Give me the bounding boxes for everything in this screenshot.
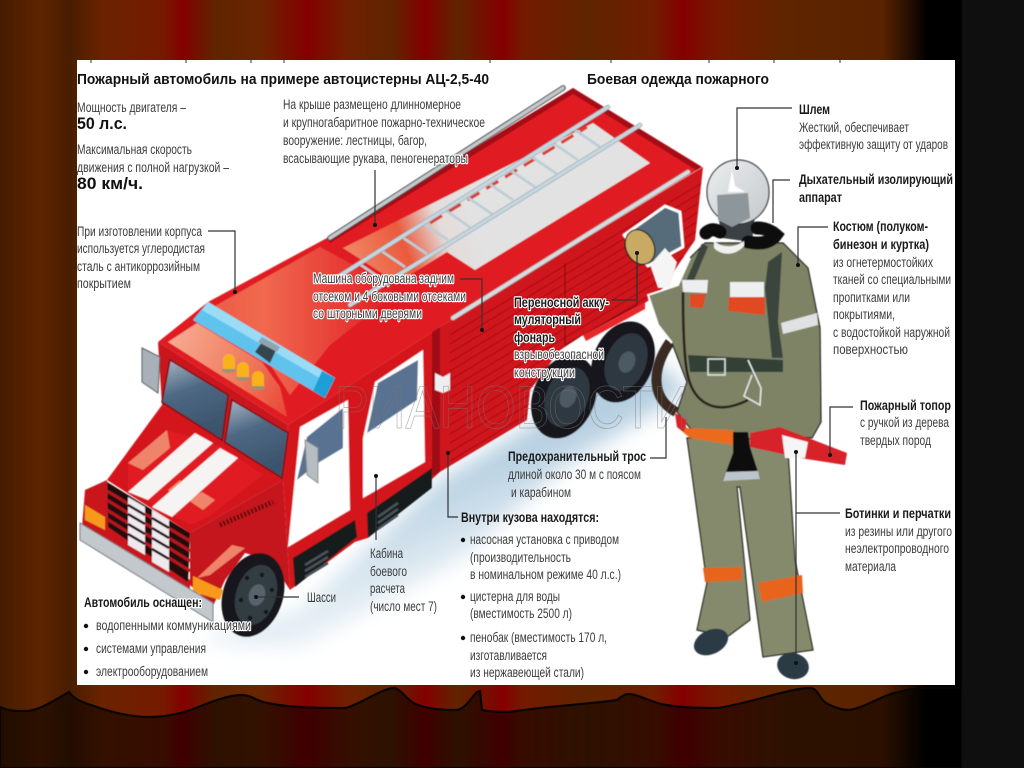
note: suit: с водостойкой наружной	[833, 325, 950, 340]
note: suit: тканей со специальными	[833, 272, 951, 287]
specs: engine and speed: 80 км/ч.	[77, 174, 143, 193]
note: helmet: эффективную защиту от ударов	[799, 137, 948, 152]
mirror left	[142, 348, 160, 393]
light bar	[193, 302, 335, 398]
ground shadow	[200, 350, 690, 650]
cab roof highlight	[215, 247, 400, 395]
back straps	[689, 245, 783, 358]
note: boots and gloves: Ботинки и перчатки	[845, 505, 951, 521]
note: roof equipment: На крыше размещено длинномерное	[283, 97, 461, 112]
rope coil	[656, 342, 676, 412]
note: body steel: При изготовлении корпуса	[77, 224, 202, 239]
note: lantern: Переносной акку-	[514, 294, 609, 310]
list: inside the body: в номинальном режиме 40 л.с.)	[470, 567, 621, 582]
neck	[718, 215, 755, 242]
fur collar	[706, 228, 776, 243]
fender left	[82, 480, 190, 592]
note: lantern: конструкции	[514, 365, 575, 380]
specs: engine and speed: Максимальная скорость	[77, 142, 192, 157]
note: boots and gloves: из резины или другого	[845, 524, 952, 539]
watermark: РИАНОВОСТИ	[335, 374, 690, 441]
note: axe: Пожарный топор	[860, 397, 951, 413]
glove on axe	[782, 435, 808, 458]
door front	[288, 400, 350, 547]
heading: truck: Пожарный автомобиль на примере автоцистерны АЦ-2,5-40	[77, 72, 489, 88]
note: suit: пропитками или	[833, 290, 910, 305]
roof rim shade	[327, 88, 702, 243]
orange safety belt	[675, 413, 733, 445]
axe handle	[750, 427, 847, 465]
firefighter illustration	[620, 160, 847, 683]
note: body steel	[77, 224, 205, 291]
sleeve reflective band	[781, 313, 818, 334]
jacket white outline	[648, 258, 690, 343]
windshield right	[225, 400, 288, 478]
sill vents	[305, 503, 398, 577]
hood raised panel	[128, 430, 263, 525]
glove on lantern	[650, 248, 677, 288]
note: body steel: сталь с антикоррозийным	[77, 259, 200, 274]
fire truck illustration	[80, 88, 710, 650]
carabiner and cord	[683, 292, 761, 407]
note: helmet	[799, 101, 948, 152]
trouser reflective bands	[703, 567, 803, 602]
sills	[293, 468, 432, 587]
list: inside the body: (производительность	[470, 550, 571, 565]
rear wheels	[519, 312, 667, 448]
note: suit	[833, 218, 951, 357]
axe blade	[723, 471, 760, 481]
door rear	[363, 350, 425, 498]
white panel on body	[435, 373, 450, 393]
beacon lights	[222, 354, 265, 390]
cab side	[283, 327, 440, 590]
boots	[690, 624, 812, 683]
list: inside the body	[461, 509, 621, 680]
label: crew cab	[370, 546, 437, 614]
list: inside the body: пенобак (вместимость 170 л,	[470, 630, 607, 645]
specs: engine and speed: 50 л.с.	[77, 114, 127, 133]
waist belt	[688, 355, 783, 372]
note: safety rope: и карабином	[511, 485, 571, 500]
list: inside the body: из нержавеющей стали)	[470, 665, 584, 680]
note: compartments	[313, 271, 466, 321]
box body side	[440, 167, 710, 472]
note: suit: из огнетермостойких	[833, 255, 933, 270]
white neck collar	[714, 241, 744, 254]
chest reflective patches	[682, 280, 765, 315]
note: roof equipment: вооружение: лестницы, багор,	[283, 133, 427, 148]
list: inside the body: изготавливается	[470, 648, 547, 663]
front wheel	[211, 545, 295, 645]
hood side	[190, 480, 290, 606]
heading: clothing: Боевая одежда пожарного	[587, 72, 769, 88]
note: safety rope: Предохранительный трос	[508, 448, 646, 464]
note: suit: покрытиями,	[833, 307, 895, 322]
roof of truck	[158, 88, 702, 425]
roof side rail	[453, 172, 688, 318]
list: vehicle equipment: электрооборудованием	[96, 664, 208, 679]
note: compartments: со шторными дверями	[313, 306, 422, 321]
note: axe: с ручкой из дерева	[860, 415, 949, 430]
note: safety rope: длиной около 30 м с поясом	[508, 467, 641, 482]
label: crew cab: боевого	[370, 564, 407, 579]
note: suit: Костюм (полуком-	[833, 218, 928, 234]
note: helmet: Шлем	[799, 101, 830, 117]
door rear window	[367, 360, 418, 433]
specs: engine and speed	[77, 100, 229, 193]
note: lantern	[514, 294, 609, 380]
note: roof equipment: и крупногабаритное пожарно-техническое	[283, 115, 485, 130]
note: compartments: отсеком и 4 боковыми отсеками	[313, 289, 466, 304]
roof back rail	[330, 88, 563, 238]
windshield left	[162, 360, 228, 440]
infographic panel	[77, 60, 955, 685]
ladder	[333, 107, 640, 305]
side mirror	[305, 440, 318, 483]
label: crew cab: (число мест 7)	[370, 599, 437, 614]
note: compartments: Машина оборудована задним	[313, 271, 454, 286]
note: axe: твердых пород	[860, 433, 931, 448]
note: safety rope	[508, 448, 646, 500]
grille	[107, 482, 190, 582]
label: chassis: Шасси	[307, 590, 336, 605]
roof compartment panel	[343, 123, 650, 283]
note: breathing apparatus: Дыхательный изолирующий	[799, 171, 953, 187]
list: vehicle equipment	[84, 594, 251, 679]
buckle	[708, 359, 725, 375]
axe head	[723, 432, 760, 480]
note: suit: бинезон и куртка)	[833, 236, 929, 252]
hood stripes	[128, 433, 238, 517]
note: body steel: используется углеродистая	[77, 241, 205, 256]
label: crew cab: расчета	[370, 581, 405, 596]
note: boots and gloves: неэлектропроводного	[845, 541, 949, 556]
face visor	[717, 193, 750, 227]
note: breathing apparatus	[799, 171, 953, 205]
cab rear pillar shade	[432, 327, 440, 476]
cab visor	[168, 323, 287, 417]
note: roof equipment	[283, 97, 485, 166]
note: suit: поверхностью	[833, 342, 908, 357]
list: inside the body: (вместимость 2500 л)	[470, 606, 572, 621]
front cab face	[158, 342, 288, 482]
bumper	[80, 523, 213, 622]
leader lines	[208, 108, 853, 665]
note: body steel: покрытием	[77, 276, 131, 291]
list: inside the body: Внутри кузова находятся:	[461, 509, 599, 525]
note: boots and gloves	[845, 505, 952, 574]
note: lantern: фонарь	[514, 329, 555, 345]
headlights	[85, 505, 223, 600]
jacket	[648, 243, 821, 439]
note: roof equipment: всасывающие рукава, пеногенераторы	[283, 151, 468, 166]
trousers	[687, 436, 813, 657]
list: vehicle equipment: водопенными коммуникациями	[96, 618, 251, 633]
list: inside the body: цистерна для воды	[470, 589, 560, 604]
label: crew cab: Кабина	[370, 546, 403, 561]
note: lantern: муляторный	[514, 311, 581, 327]
list: vehicle equipment: системами управления	[96, 641, 206, 656]
side louvers	[220, 502, 273, 525]
list: inside the body: насосная установка с приводом	[470, 532, 619, 547]
note: breathing apparatus: аппарат	[799, 189, 842, 205]
hood	[107, 405, 283, 533]
hood highlights	[128, 430, 245, 578]
note: boots and gloves: материала	[845, 559, 896, 574]
lantern	[620, 206, 683, 269]
note: axe	[860, 397, 951, 448]
note: helmet: Жесткий, обеспечивает	[799, 120, 909, 135]
note: lantern: взрывобезопасной	[514, 347, 604, 362]
red dashes under ladder	[430, 127, 587, 223]
helmet	[707, 160, 769, 224]
specs: engine and speed: движения с полной нагрузкой –	[77, 160, 229, 175]
specs: engine and speed: Мощность двигателя –	[77, 100, 186, 115]
list: vehicle equipment: Автомобиль оснащен:	[84, 594, 202, 610]
door front window	[297, 408, 343, 480]
